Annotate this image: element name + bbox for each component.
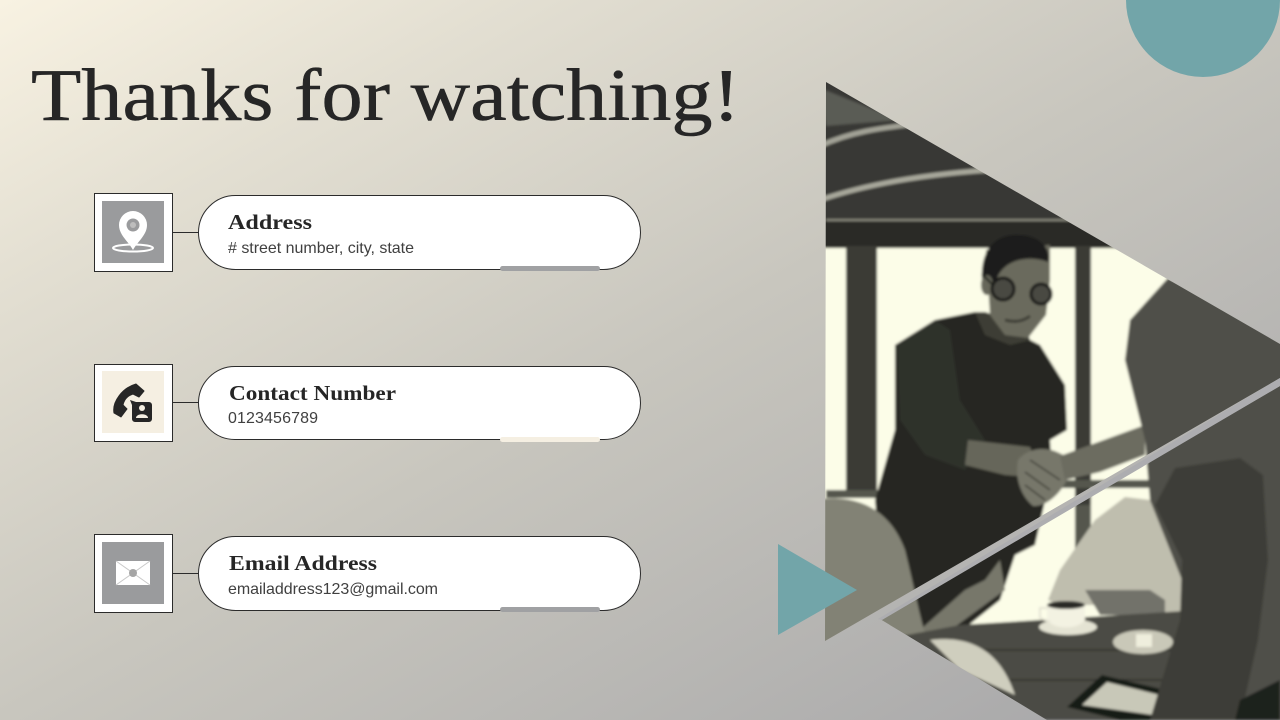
icon: location pin xyxy=(102,201,164,263)
heading: address: Address xyxy=(228,210,312,234)
icon: phone and contact xyxy=(102,371,164,433)
pill accent: email xyxy=(500,607,600,612)
photo: business handshake xyxy=(820,80,1280,720)
icon frame: email xyxy=(94,534,172,612)
icon: envelope xyxy=(102,542,164,604)
tablet xyxy=(1067,675,1165,720)
pill accent: phone xyxy=(500,437,600,442)
plate xyxy=(1113,630,1173,654)
pill: email xyxy=(198,536,640,610)
heading: email: Email Address xyxy=(229,551,377,575)
text: email value: emailaddress123@gmail.com xyxy=(228,581,438,598)
connector: phone xyxy=(172,402,199,404)
blonde seated person xyxy=(825,496,925,641)
man xyxy=(875,312,1067,640)
connector: address xyxy=(172,232,199,234)
seated woman xyxy=(1048,497,1185,615)
contact row: phone xyxy=(94,364,640,442)
teal triangle xyxy=(778,544,857,635)
decorative teal circle xyxy=(1126,0,1280,77)
pill: address xyxy=(198,196,640,270)
contact row: address xyxy=(94,194,640,272)
title: Thanks for watching! xyxy=(31,55,740,137)
coffee cup xyxy=(1039,619,1097,635)
text: phone value: 0123456789 xyxy=(228,410,318,427)
connector: email xyxy=(172,572,199,574)
icon frame: phone xyxy=(94,364,172,442)
diagonal stripe xyxy=(878,378,1280,620)
person in foreground xyxy=(1125,278,1280,720)
icon frame: address xyxy=(94,194,172,272)
table xyxy=(906,610,1182,720)
contact row: email xyxy=(94,534,640,612)
pill accent: address xyxy=(500,266,600,271)
pill: phone xyxy=(198,366,640,440)
heading: phone: Contact Number xyxy=(229,381,396,405)
text: address value: # street number, city, state xyxy=(228,240,414,257)
